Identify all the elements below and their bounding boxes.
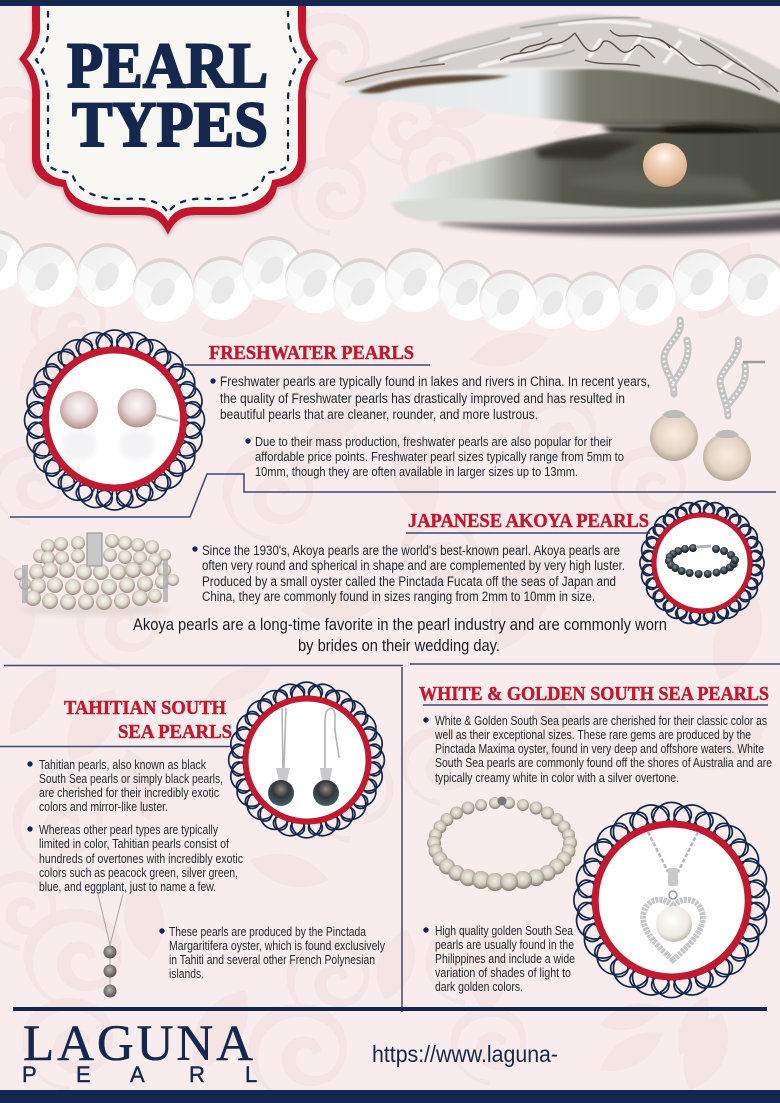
text: tahitian paragraph 1: Tahitian pearls, also known as black xyxy=(39,757,206,772)
text: tahitian paragraph 1: colors and mirror-like luster. xyxy=(39,799,168,814)
pearl in the shell xyxy=(643,143,687,187)
text: tahitian paragraph 1: are cherished for their incredibly exotic xyxy=(39,785,219,800)
text: freshwater paragraph 2: 10mm, though they are often available in larger sizes up to 13mm. xyxy=(255,464,578,479)
text: golden south sea paragraph xyxy=(423,923,575,994)
title badge xyxy=(19,6,318,235)
oyster shell photo xyxy=(336,15,780,235)
text: tahitian paragraph 2: blue, and eggplant, just to name a few. xyxy=(39,879,216,894)
text: tahitian paragraph 3: Margaritifera oyster, which is found exclusively xyxy=(169,938,385,953)
text: freshwater paragraph 2: Due to their mass production, freshwater pearls are also popular for their xyxy=(255,434,613,449)
text: white south sea paragraph: typically creamy white in color with a silver overtone. xyxy=(435,770,679,785)
text: white south sea paragraph xyxy=(423,713,772,785)
text: freshwater paragraph 1 xyxy=(210,374,650,422)
logo: laguna pearl: E xyxy=(76,1062,91,1087)
text: tahitian paragraph 2 xyxy=(27,822,243,894)
text: akoya paragraph: China, they are commonly found in sizes ranging from 2mm to 10mm in size. xyxy=(202,589,595,604)
text: tahitian paragraph 2: colors such as peacock green, silver green, xyxy=(39,865,238,880)
text: freshwater paragraph 2 xyxy=(245,434,624,479)
title text xyxy=(67,30,268,161)
text: tahitian paragraph 2: limited in color, Tahitian pearls consist of xyxy=(39,836,229,851)
logo: laguna pearl: R xyxy=(189,1062,205,1087)
icon: white pearl bracelet xyxy=(427,796,577,891)
text: golden south sea paragraph: variation of shades of light to xyxy=(435,965,571,980)
text: akoya paragraph: Since the 1930's, Akoya pearls are the world's best-known pearl. Akoya pearls are xyxy=(202,543,620,558)
icon: white frame with heart pendant xyxy=(572,801,771,999)
text: golden south sea paragraph: High quality golden South Sea xyxy=(435,923,574,938)
text: tahitian paragraph 2: Whereas other pearl types are typically xyxy=(39,822,218,837)
bottom bar xyxy=(0,1090,780,1103)
heading: freshwater pearls: FRESHWATER PEARLS xyxy=(209,342,414,364)
text: golden south sea paragraph: pearls are usually found in the xyxy=(435,937,574,952)
text: golden south sea paragraph: dark golden colors. xyxy=(435,979,523,994)
text: akoya paragraph xyxy=(192,543,625,604)
top bar xyxy=(0,0,780,6)
icon: tahitian pendant necklace xyxy=(98,894,123,998)
heading: tahitian south sea pearls: TAHITIAN SOUTH xyxy=(64,697,226,719)
brown streaks on the shell lip xyxy=(358,75,510,93)
logo: laguna pearl: P xyxy=(22,1062,37,1087)
icon: freshwater frame with stud earrings xyxy=(23,329,206,511)
text: tahitian paragraph 3: islands. xyxy=(169,966,204,981)
upper shell ridges xyxy=(336,15,780,112)
upper shell inner lip xyxy=(345,69,780,132)
text: golden south sea paragraph: Philippines and include a wide xyxy=(435,951,575,966)
pearl strand divider xyxy=(0,230,780,331)
icon: akoya frame with dark bracelet xyxy=(639,500,765,626)
text: tahitian paragraph 1: South Sea pearls or simply black pearls, xyxy=(39,771,223,786)
text: freshwater paragraph 1: beautiful pearls that are cleaner, rounder, and more lustrous. xyxy=(220,407,538,422)
text: freshwater paragraph 1: the quality of Freshwater pearls has drastically improved and has resulted in xyxy=(220,391,625,406)
callout: akoya wedding note xyxy=(133,615,667,655)
text: tahitian paragraph 1 xyxy=(27,757,223,814)
icon: tahitian frame with earrings xyxy=(227,681,386,839)
lower shell xyxy=(391,132,780,220)
text: tahitian paragraph 3: in Tahiti and several other French Polynesian xyxy=(169,952,375,967)
icon: drop earrings xyxy=(650,320,765,481)
callout: akoya wedding note: Akoya pearls are a long-time favorite in the pearl industry and are commonly worn xyxy=(133,615,667,634)
connector lines xyxy=(0,365,780,1012)
website url: https://www.laguna- xyxy=(372,1041,558,1067)
text: tahitian paragraph 2: hundreds of overtones with incredibly exotic xyxy=(39,851,243,866)
logo: laguna pearl: L xyxy=(245,1062,257,1087)
callout: akoya wedding note: by brides on their wedding day. xyxy=(298,636,500,655)
title text: TYPES xyxy=(72,89,268,161)
logo: laguna pearl: A xyxy=(130,1062,145,1087)
text: akoya paragraph: Produced by a small oyster called the Pinctada Fucata off the seas of Japan and xyxy=(202,574,616,589)
text: freshwater paragraph 1: Freshwater pearls are typically found in lakes and rivers in China. In recent years, xyxy=(220,374,650,389)
heading: tahitian south sea pearls: SEA PEARLS xyxy=(118,721,232,743)
text: freshwater paragraph 2: affordable price points. Freshwater pearl sizes typically range from 5mm to xyxy=(255,449,624,464)
text: tahitian paragraph 3: These pearls are produced by the Pinctada xyxy=(169,924,367,939)
heading: japanese akoya pearls: JAPANESE AKOYA PEARLS xyxy=(408,510,649,532)
heading: tahitian south sea pearls xyxy=(64,697,232,743)
text: akoya paragraph: often very round and spherical in shape and are complemented by very high luster. xyxy=(202,558,625,573)
text: tahitian paragraph 3 xyxy=(159,924,385,981)
logo: laguna pearl: LAGUNA xyxy=(23,1016,253,1072)
shell shadow xyxy=(440,212,780,235)
title text: PEARL xyxy=(67,30,268,102)
footer rule xyxy=(13,1007,767,1011)
icon: akoya three-row bracelet xyxy=(14,533,179,615)
